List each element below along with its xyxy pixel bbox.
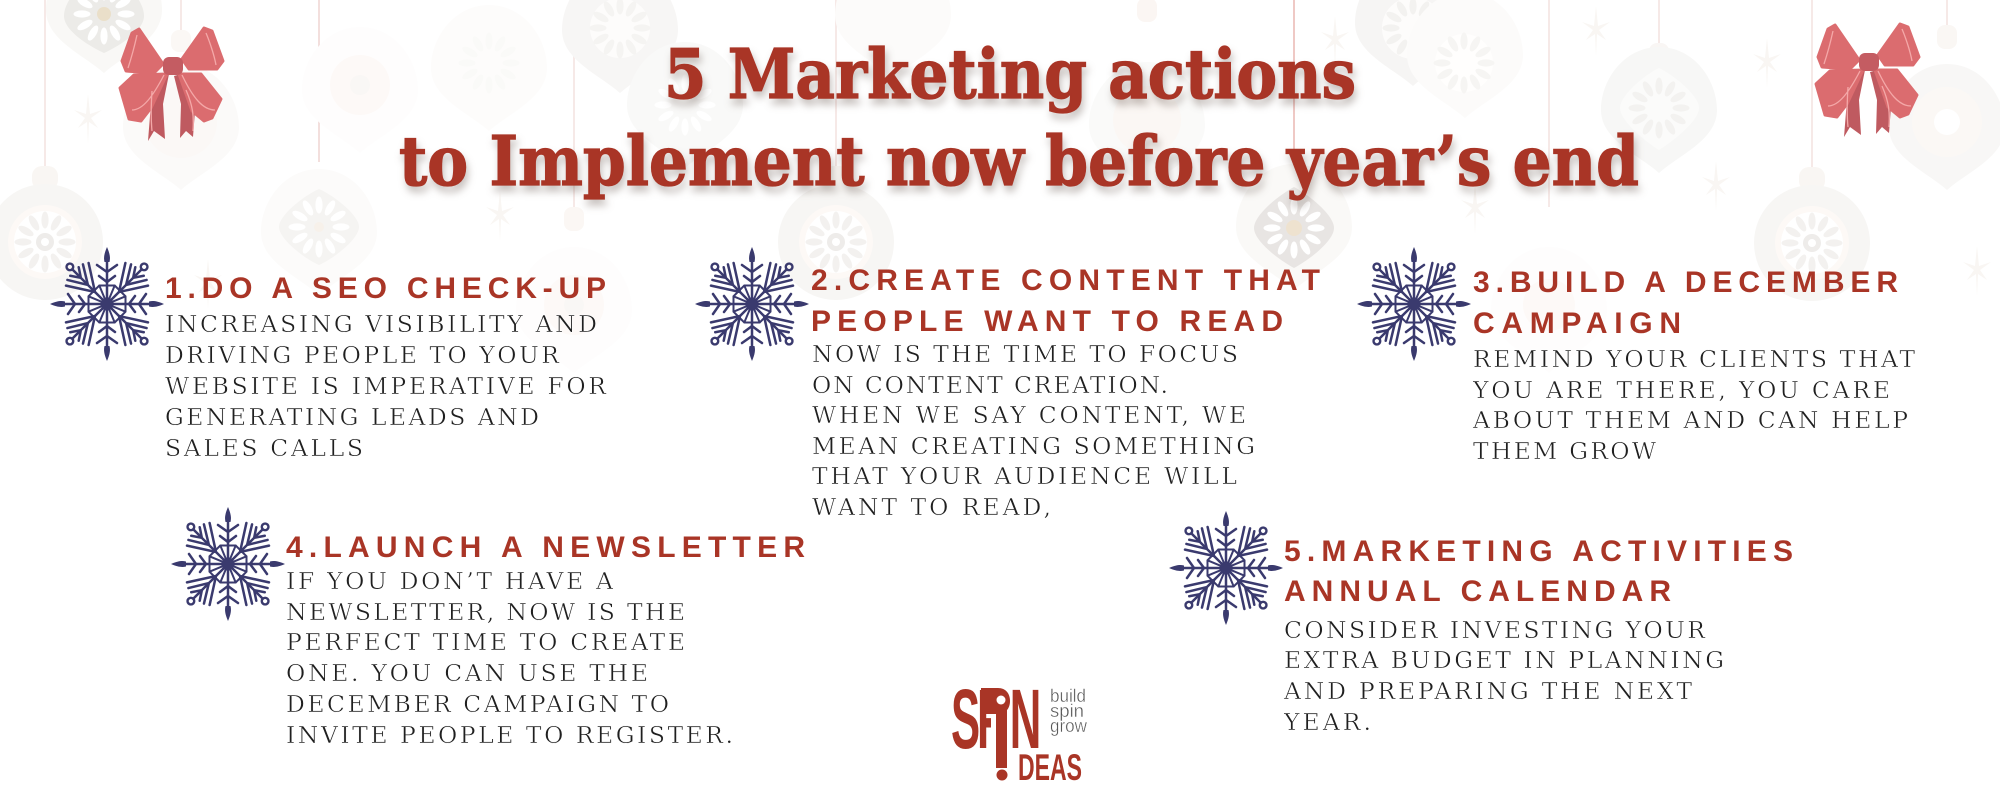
text block: action 5: CONSIDER INVESTING YOUR (1284, 616, 1706, 644)
text block: action 4 (286, 567, 733, 749)
text block: action 1: SALES CALLS (165, 434, 363, 462)
text block: action 4: NEWSLETTER, NOW IS THE (286, 598, 685, 626)
text block: action 1 (165, 310, 607, 462)
heading: action 2: 2.CREATE CONTENT THAT (811, 264, 1320, 297)
heading: action 5 (1284, 535, 1793, 608)
heading: action 2: PEOPLE WANT TO READ (811, 305, 1283, 338)
text block: action 5: AND PREPARING THE NEXT (1283, 677, 1692, 705)
icon: snowflake 3 (1357, 247, 1471, 361)
text block: action 1: DRIVING PEOPLE TO YOUR (165, 341, 560, 369)
heading: action 3 (1473, 266, 1898, 340)
text block: action 2 (812, 340, 1255, 521)
heading: action 5: ANNUAL CALENDAR (1284, 575, 1671, 608)
heading: action 3: CAMPAIGN (1473, 307, 1681, 340)
text block: action 2: WANT TO READ, (812, 493, 1051, 521)
heading: action 4: 4.LAUNCH A NEWSLETTER (286, 531, 805, 564)
text block: action 5: EXTRA BUDGET IN PLANNING (1284, 646, 1724, 674)
text block: action 1: INCREASING VISIBILITY AND (165, 310, 597, 338)
background ornaments (0, 0, 2000, 373)
text block: action 4: ONE. YOU CAN USE THE (286, 659, 648, 687)
panel: action 2 (695, 247, 1320, 521)
text block: action 5: YEAR. (1283, 708, 1371, 736)
text block: action 2: NOW IS THE TIME TO FOCUS (812, 340, 1238, 368)
text block: action 5 (1283, 616, 1724, 736)
text block: action 1: WEBSITE IS IMPERATIVE FOR (165, 372, 607, 400)
logo: Spin Ideas: DEAS (1018, 747, 1082, 788)
icon: snowflake 5 (1169, 511, 1283, 625)
icon: snowflake 2 (695, 247, 809, 361)
heading: action 5: 5.MARKETING ACTIVITIES (1284, 535, 1793, 568)
logo: Spin Ideas: build (1050, 686, 1086, 706)
text block: action 2: WHEN WE SAY CONTENT, WE (812, 401, 1246, 429)
icon: snowflake 1 (50, 247, 164, 361)
text block: action 2: ON CONTENT CREATION. (812, 371, 1168, 399)
text block: action 3: YOU ARE THERE, YOU CARE (1472, 376, 1890, 404)
heading: action 3: 3.BUILD A DECEMBER (1473, 266, 1898, 299)
heading: action 2 (811, 264, 1320, 338)
text block: action 1: GENERATING LEADS AND (165, 403, 539, 431)
icon: right ribbon bow (1816, 24, 1919, 137)
logo: Spin Ideas: spin (1050, 701, 1084, 721)
icon: snowflake 4 (171, 507, 285, 621)
text block: action 2: MEAN CREATING SOMETHING (812, 432, 1255, 460)
text block: action 4: PERFECT TIME TO CREATE (286, 628, 685, 656)
title: to Implement now before year’s end (399, 122, 1639, 202)
text block: action 4: IF YOU DON’T HAVE A (286, 567, 614, 595)
text block: action 4: INVITE PEOPLE TO REGISTER. (286, 721, 733, 749)
heading: action 1: 1.DO A SEO CHECK-UP (165, 272, 606, 305)
text block: action 2: THAT YOUR AUDIENCE WILL (812, 462, 1237, 490)
text block: action 3: ABOUT THEM AND CAN HELP (1472, 406, 1908, 434)
text block: action 4: DECEMBER CAMPAIGN TO (286, 690, 669, 718)
panel: action 5 (1169, 511, 1793, 736)
logo: Spin Ideas (951, 673, 1088, 788)
panel: action 1 (50, 247, 607, 462)
panel: action 3 (1357, 247, 1915, 465)
title: 5 Marketing actions (664, 35, 1356, 115)
logo: Spin Ideas: SPIN (951, 673, 1041, 767)
title (399, 35, 1639, 202)
icon: left ribbon bow (120, 28, 223, 141)
panel: action 4 (171, 507, 805, 749)
logo: Spin Ideas: grow (1050, 716, 1088, 736)
text block: action 3 (1472, 345, 1915, 465)
text block: action 3: THEM GROW (1473, 437, 1657, 465)
text block: action 3: REMIND YOUR CLIENTS THAT (1473, 345, 1915, 373)
